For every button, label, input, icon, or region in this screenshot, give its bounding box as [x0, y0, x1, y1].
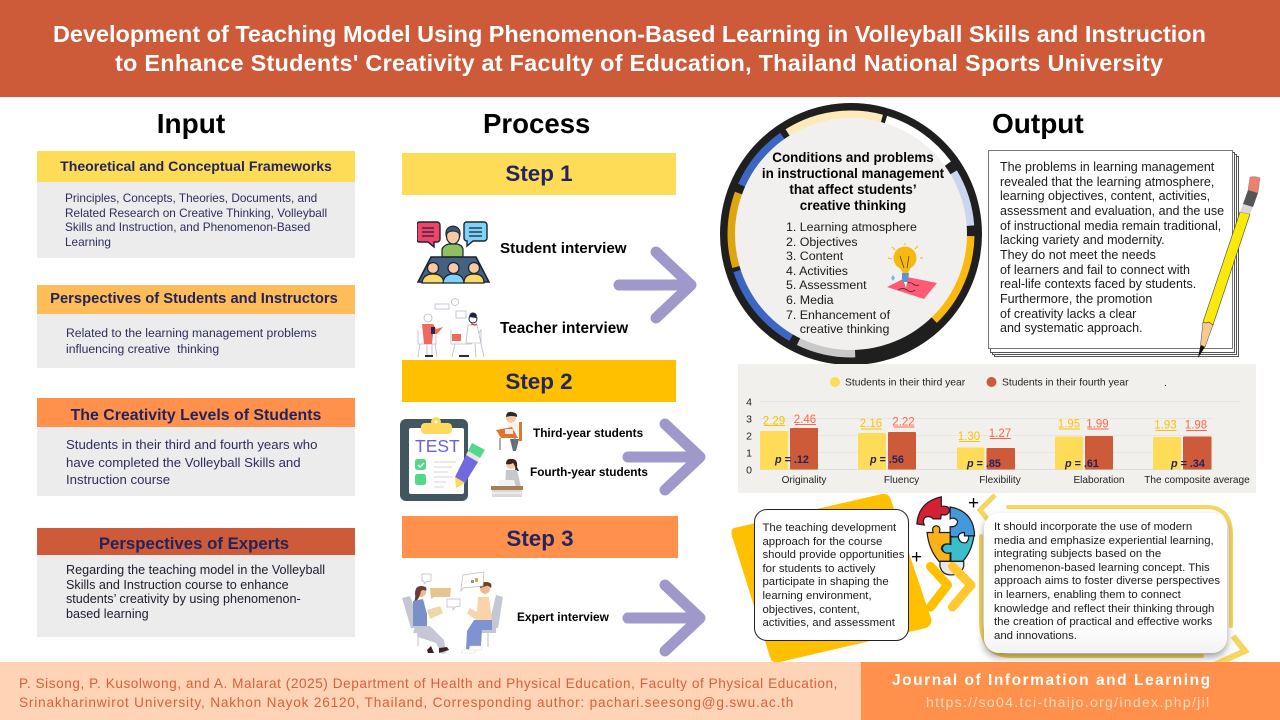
- icon: expert interview illustration: [402, 572, 503, 654]
- label: student interview: Student interview: [500, 240, 627, 257]
- note text: real-life contexts faced by students.: [1000, 277, 1196, 291]
- category labels: [782, 475, 1250, 486]
- step 2 bar: [402, 360, 676, 402]
- numbered list: 6. Media: [786, 293, 834, 307]
- value labels: 2.16: [860, 418, 882, 430]
- panel: creativity levels: [37, 398, 355, 496]
- panel body: based learning: [66, 607, 149, 621]
- icon: fourth-year student at desk: [491, 458, 523, 497]
- circular panel: conditions and problems: [720, 103, 982, 364]
- icon: third-year student at desk: [496, 412, 522, 451]
- text box: teaching development approach: activities, and assessment: [762, 617, 895, 629]
- numbered list: creative thinking: [800, 322, 889, 336]
- note text: revealed that the learning atmosphere,: [1000, 175, 1214, 189]
- p values: p = .34: [1170, 458, 1205, 470]
- panel body: [37, 314, 355, 368]
- text box: recommendations: phenomenon-based learning concept. This: [994, 562, 1210, 574]
- y axis labels: 4: [746, 396, 752, 408]
- note text: learning objectives, content, activities,: [1000, 189, 1210, 203]
- text box: recommendations: [984, 513, 1227, 653]
- text box: teaching development approach: for students to actively: [762, 563, 875, 575]
- legend: Students in their third year: [845, 378, 966, 388]
- note text: [1000, 160, 1224, 335]
- category labels: Elaboration: [1073, 475, 1125, 486]
- panel header: Theoretical and Conceptual Frameworks: [60, 158, 332, 174]
- panel body: Learning: [65, 235, 111, 249]
- panel header: [37, 528, 355, 555]
- panel body: [37, 427, 355, 496]
- category labels: Flexibility: [979, 475, 1022, 486]
- text box: recommendations: approach aims to foster diverse perspectives: [994, 575, 1220, 587]
- bar chart: creativity scores: [738, 364, 1256, 493]
- note text: They do not meet the needs: [1000, 248, 1156, 262]
- panel header: [37, 398, 355, 427]
- note text: lacking variety and modernity.: [1000, 233, 1165, 247]
- note text: and systematic approach.: [1000, 321, 1143, 335]
- note text: of learners and fail to connect with: [1000, 263, 1190, 277]
- text box: teaching development approach: The teaching development: [762, 522, 896, 534]
- panel header: [37, 285, 355, 314]
- icon: puzzle light bulb: [916, 496, 976, 576]
- y axis labels: 2: [746, 430, 752, 442]
- note text: Furthermore, the promotion: [1000, 292, 1152, 306]
- panel header: Perspectives of Experts: [99, 534, 289, 553]
- footer: authors: Srinakharinwirot University, Nakhon Nayok 26120, Thailand, Corresponding author: pachari.seesong@g.swu.ac.th: [19, 695, 794, 710]
- numbered list: 3. Content: [786, 249, 843, 263]
- arrow: step 3: [622, 580, 706, 656]
- panel header: Perspectives of Students and Instructors: [50, 291, 338, 307]
- text box: teaching development approach: [754, 509, 909, 641]
- numbered list: [786, 220, 917, 336]
- ring decoration: [720, 103, 982, 364]
- text box: recommendations: in learners, enabling them to connect: [994, 589, 1181, 601]
- title banner: Development of Teaching Model Using Phenomenon-Based Learning in Volleyball Skills and Instruction: [53, 21, 1206, 47]
- value labels: 1.30: [958, 431, 980, 443]
- panel header: [37, 151, 355, 182]
- icon: test clipboard and pencil: TEST: [415, 436, 460, 456]
- step 1 bar: [402, 153, 676, 195]
- panel body: influencing creative thinking: [66, 342, 219, 356]
- circle heading: in instructional management: [762, 166, 944, 181]
- value labels: 1.95: [1058, 418, 1080, 430]
- value labels: 1.98: [1185, 420, 1207, 432]
- arrow: step 1: [614, 246, 696, 324]
- chevron arrows: [926, 562, 976, 612]
- heading: Input: Input: [157, 108, 225, 139]
- value labels: [763, 414, 1207, 443]
- label: fourth-year students: Fourth-year students: [530, 465, 648, 479]
- value labels: 2.22: [892, 416, 915, 428]
- step 1 bar: Step 1: [505, 161, 573, 186]
- title banner: [0, 0, 1280, 97]
- panel: students and instructors: [37, 285, 355, 368]
- category labels: Fluency: [884, 475, 920, 486]
- heading: Output: Output: [992, 108, 1084, 139]
- panel body: students’ creativity by using phenomenon-: [66, 592, 301, 606]
- numbered list: 4. Activities: [786, 264, 848, 278]
- text box: teaching development approach: objectives, content,: [762, 604, 860, 616]
- circle heading: that affect students’: [789, 182, 917, 197]
- panel: theoretical frameworks: [37, 151, 355, 258]
- title banner: to Enhance Students' Creativity at Faculty of Education, Thailand National Sports University: [115, 50, 1163, 76]
- plus sign top: +: [968, 493, 979, 514]
- circle heading: Conditions and problems: [772, 150, 934, 165]
- value labels: 1.27: [989, 428, 1011, 440]
- footer: journal: Journal of Information and Learning: [892, 672, 1212, 689]
- yellow frame and chevrons: [976, 493, 1250, 662]
- panel: experts: [37, 528, 355, 637]
- panel header: The Creativity Levels of Students: [71, 407, 321, 424]
- panel body: [37, 182, 355, 258]
- text box: recommendations: and innovations.: [994, 630, 1077, 642]
- icon: light bulb with pen: [887, 243, 937, 299]
- category labels: Originality: [782, 475, 827, 486]
- yellow backdrop shape: [731, 494, 932, 662]
- step 3 bar: [402, 516, 678, 558]
- p values: [774, 454, 1205, 470]
- note text: assessment and evaluation, and the use: [1000, 204, 1224, 218]
- panel body: Skills and Instruction, and Phenomenon-Based: [65, 220, 310, 234]
- panel body: Related to the learning management problems: [66, 326, 317, 340]
- step 2 bar: Step 2: [505, 369, 573, 394]
- note text: of instructional media remain traditional,: [1000, 219, 1221, 233]
- stacked paper sheets: [988, 150, 1239, 357]
- p values: p = .12: [774, 454, 809, 466]
- label: expert interview: Expert interview: [517, 610, 609, 624]
- p values: p = .56: [869, 454, 904, 466]
- value labels: 2.29: [763, 416, 785, 428]
- panel body: Students in their third and fourth years who: [66, 437, 317, 452]
- numbered list: 5. Assessment: [786, 278, 867, 292]
- icon: pencil: [1198, 176, 1260, 358]
- plus sign left: +: [911, 547, 922, 568]
- panel body: Related Research on Creative Thinking, Volleyball: [65, 206, 327, 220]
- text box: recommendations: integrating subjects based on the: [994, 548, 1161, 560]
- numbered list: 7. Enhancement of: [786, 308, 890, 322]
- p values: p = .85: [966, 458, 1001, 470]
- text box: recommendations: It should incorporate the use of modern: [994, 521, 1192, 533]
- panel body: Principles, Concepts, Theories, Documents, and: [65, 191, 317, 205]
- y axis labels: 0: [746, 464, 752, 476]
- panel body: [37, 555, 355, 637]
- legend: Students in their fourth year: [1002, 378, 1129, 388]
- circle heading: creative thinking: [800, 198, 906, 213]
- icon: test clipboard and pencil: [400, 417, 485, 501]
- legend: [830, 377, 1167, 389]
- label: third-year students: Third-year students: [533, 426, 643, 440]
- footer: authors: P. Sisong, P. Kusolwong, and A. Malarat (2025) Department of Health and Physical Education, Faculty of Physical Education,: [19, 676, 838, 691]
- panel body: Instruction course: [66, 472, 170, 487]
- note text: The problems in learning management: [1000, 160, 1214, 174]
- panel body: Regarding the teaching model in the Volleyball: [66, 563, 325, 577]
- panel body: have completed the Volleyball Skills and: [66, 455, 301, 470]
- value labels: 2.46: [794, 414, 816, 426]
- arrow: step 2: [622, 418, 706, 496]
- p values: p = .61: [1064, 458, 1099, 470]
- footer: journal: [861, 662, 1280, 720]
- text box: teaching development approach: learning environment,: [762, 590, 872, 602]
- step 3 bar: Step 3: [506, 526, 574, 551]
- bars: [760, 428, 1212, 470]
- heading: Process: Process: [483, 108, 590, 139]
- note text: of creativity lacks a clear: [1000, 307, 1136, 321]
- text box: teaching development approach: should provide opportunities: [762, 549, 904, 561]
- text box: teaching development approach: participate in shaping the: [762, 576, 889, 588]
- y axis labels: [746, 396, 752, 476]
- value labels: 1.93: [1154, 420, 1177, 432]
- icon: teacher interview illustration: [418, 298, 484, 357]
- footer: authors: [0, 662, 861, 720]
- panel body: Skills and Instruction course to enhance: [66, 578, 289, 592]
- y axis labels: 1: [746, 448, 752, 460]
- category labels: The composite average: [1144, 475, 1250, 486]
- label: teacher interview: Teacher interview: [500, 320, 628, 337]
- numbered list: 1. Learning atmosphere: [786, 220, 917, 234]
- value labels: 1.99: [1086, 418, 1109, 430]
- note paper: output summary: [988, 150, 1239, 357]
- numbered list: 2. Objectives: [786, 235, 858, 249]
- circle heading: [762, 150, 944, 213]
- text box: recommendations: media and emphasize experiential learning,: [994, 535, 1214, 547]
- text box: teaching development approach: approach for the course: [762, 536, 882, 548]
- legend: .: [1164, 378, 1167, 389]
- text box: recommendations: knowledge and reflect their thinking through: [994, 603, 1214, 615]
- footer: journal: https://so04.tci-thaijo.org/index.php/jil: [926, 694, 1210, 710]
- text box: recommendations: the creation of practical and effective works: [994, 616, 1212, 628]
- icon: student interview group: [417, 221, 490, 284]
- y axis labels: 3: [746, 414, 752, 426]
